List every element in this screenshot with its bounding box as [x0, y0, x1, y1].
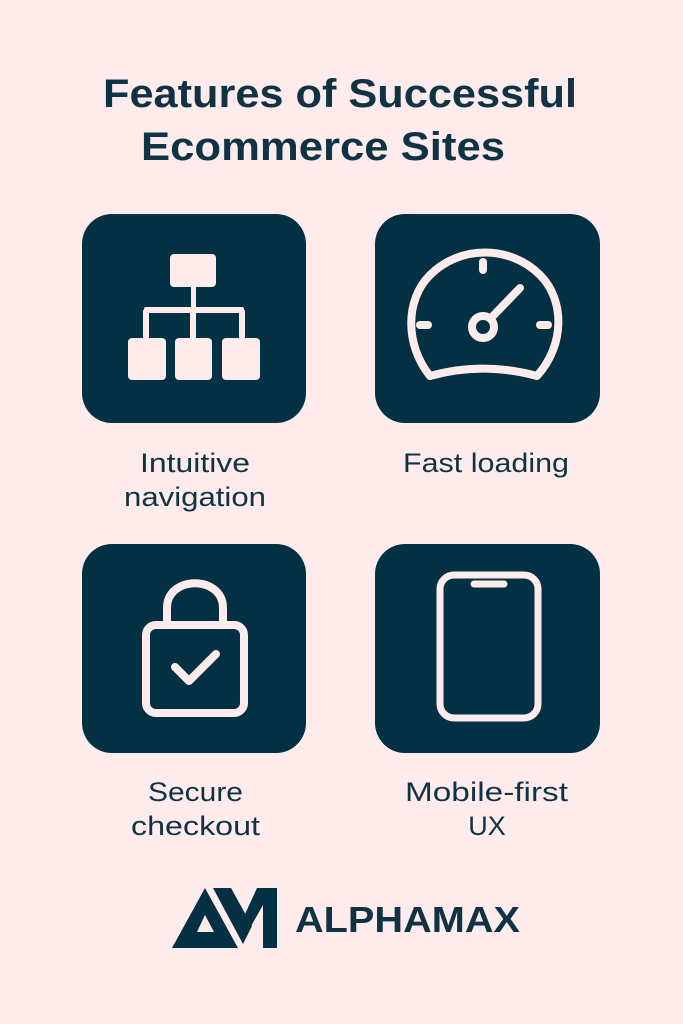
label: intuitive navigation — [124, 448, 266, 512]
label: intuitive navigation: Intuitive — [140, 448, 250, 478]
icon: phone — [440, 575, 538, 718]
icon: speedometer — [411, 252, 558, 376]
panel: intuitive navigation — [82, 214, 306, 423]
label: mobile-first UX: Mobile-first — [405, 777, 569, 807]
label: secure checkout — [131, 777, 261, 841]
logo — [172, 888, 520, 948]
title: Ecommerce Sites — [141, 125, 505, 169]
label: mobile-first UX: UX — [468, 811, 506, 841]
icon: AM mark — [172, 888, 277, 948]
title: Features of Successful — [103, 72, 577, 116]
title — [103, 72, 577, 169]
label: intuitive navigation: navigation — [124, 482, 266, 512]
label: mobile-first UX — [405, 777, 569, 841]
label: secure checkout: checkout — [131, 811, 261, 841]
brand name: ALPHAMAX — [295, 899, 520, 940]
label: secure checkout: Secure — [148, 777, 243, 807]
label: fast loading: Fast loading — [403, 448, 569, 478]
icon: lock — [146, 583, 244, 713]
icon: sitemap — [128, 254, 260, 380]
panel: mobile-first UX — [375, 544, 600, 753]
panel: secure checkout — [82, 544, 306, 753]
panel: fast loading — [375, 214, 600, 423]
